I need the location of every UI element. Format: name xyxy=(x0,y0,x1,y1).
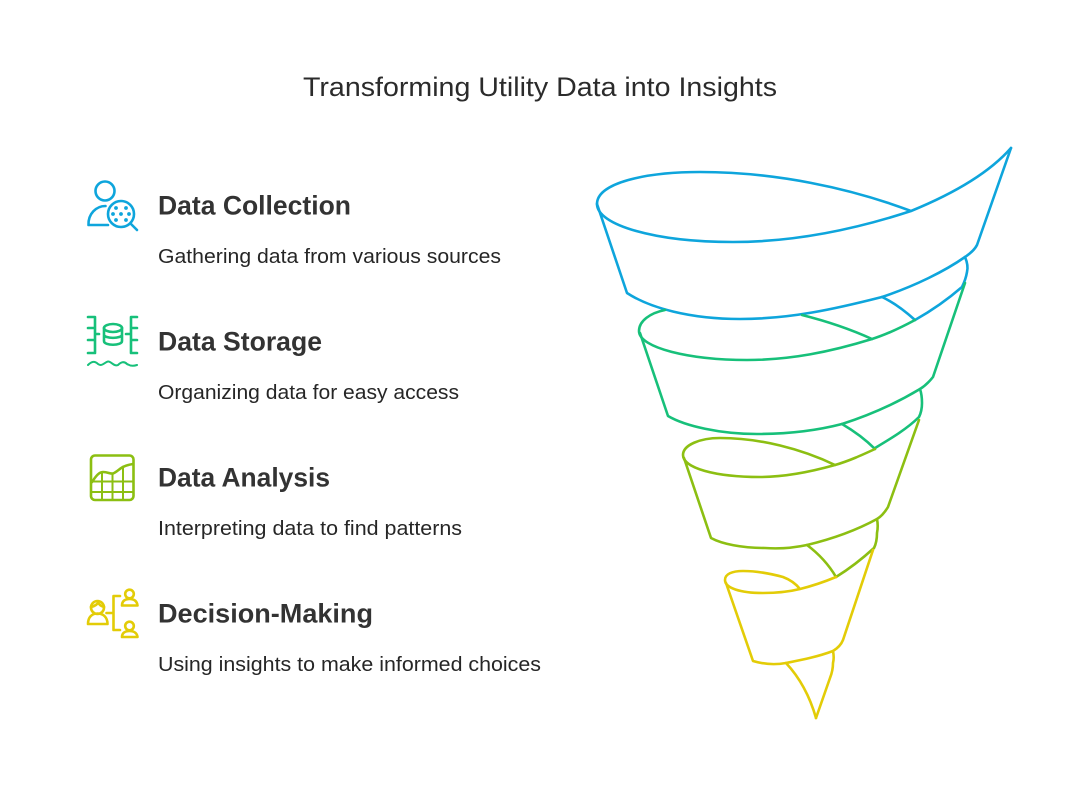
description: data analysis: Interpreting data to find patterns xyxy=(158,518,462,540)
chart: spiral funnel xyxy=(597,148,1011,718)
description: data collection: Gathering data from various sources xyxy=(158,246,501,268)
funnel tier: green xyxy=(639,283,965,449)
panel: data storage xyxy=(88,317,459,404)
heading: data analysis: Data Analysis xyxy=(158,462,330,492)
panel: decision-making xyxy=(88,590,541,676)
icon: data lake xyxy=(88,317,137,366)
funnel tier: olive xyxy=(683,420,919,577)
heading: data storage: Data Storage xyxy=(158,326,322,356)
description: decision-making: Using insights to make informed choices xyxy=(158,654,541,676)
description: data storage: Organizing data for easy access xyxy=(158,382,459,404)
funnel tier: blue xyxy=(597,148,1011,320)
panel: data analysis xyxy=(91,456,462,540)
panel: data collection xyxy=(88,182,501,268)
heading: data collection: Data Collection xyxy=(158,190,351,220)
icon: chart on grid xyxy=(91,456,134,500)
funnel tier: yellow xyxy=(725,550,873,718)
heading: decision-making: Decision-Making xyxy=(158,598,373,628)
icon: person with magnifier xyxy=(88,182,137,230)
title: Transforming Utility Data into Insights xyxy=(303,72,777,102)
icon: people hierarchy xyxy=(88,590,138,637)
